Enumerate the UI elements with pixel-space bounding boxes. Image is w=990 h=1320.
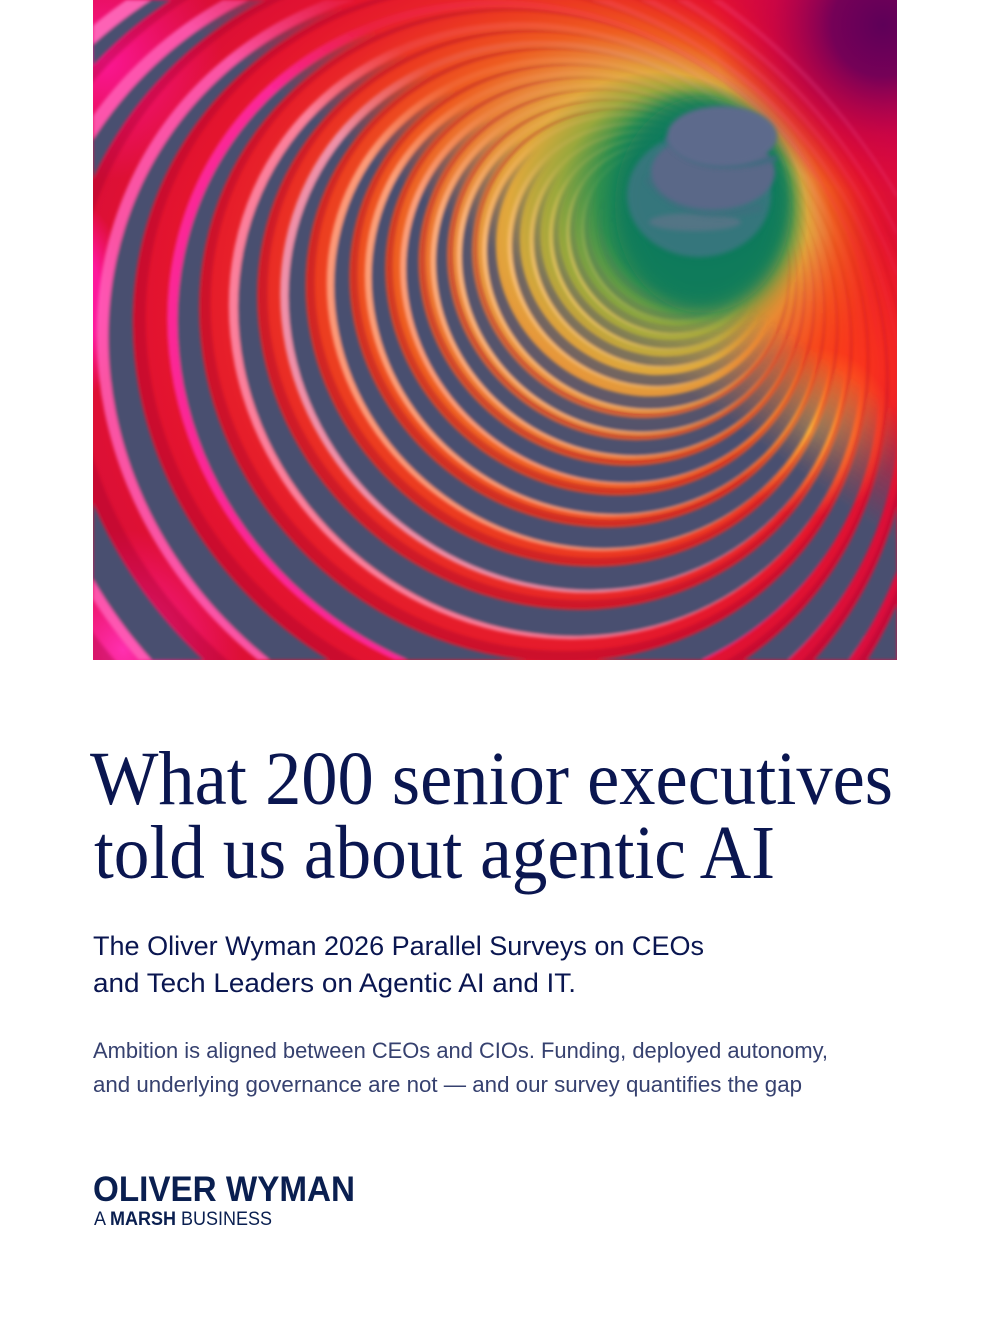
spiral ring shading [93,0,897,660]
intro paragraph [93,1038,828,1097]
tunnel opening at the far end [615,97,791,313]
logo: Oliver Wyman, a Marsh business: A MARSH BUSINESS [94,1209,272,1230]
intro paragraph: and underlying governance are not — and our survey quantifies the gap [93,1072,802,1097]
logo: Oliver Wyman, a Marsh business: OLIVER WYMAN [93,1170,355,1209]
title: told us about agentic AI [94,811,775,895]
title [90,737,893,895]
subtitle: The Oliver Wyman 2026 Parallel Surveys on CEOs [93,931,704,961]
colour field of the tunnel [93,0,897,660]
subtitle [93,931,704,998]
page text [90,737,893,1230]
hero image: rainbow spiral tunnel [93,0,897,660]
intro paragraph: Ambition is aligned between CEOs and CIOs. Funding, deployed autonomy, [93,1038,828,1063]
title: What 200 senior executives [90,737,893,821]
subtitle: and Tech Leaders on Agentic AI and IT. [93,968,576,998]
logo: Oliver Wyman, a Marsh business [93,1170,355,1230]
